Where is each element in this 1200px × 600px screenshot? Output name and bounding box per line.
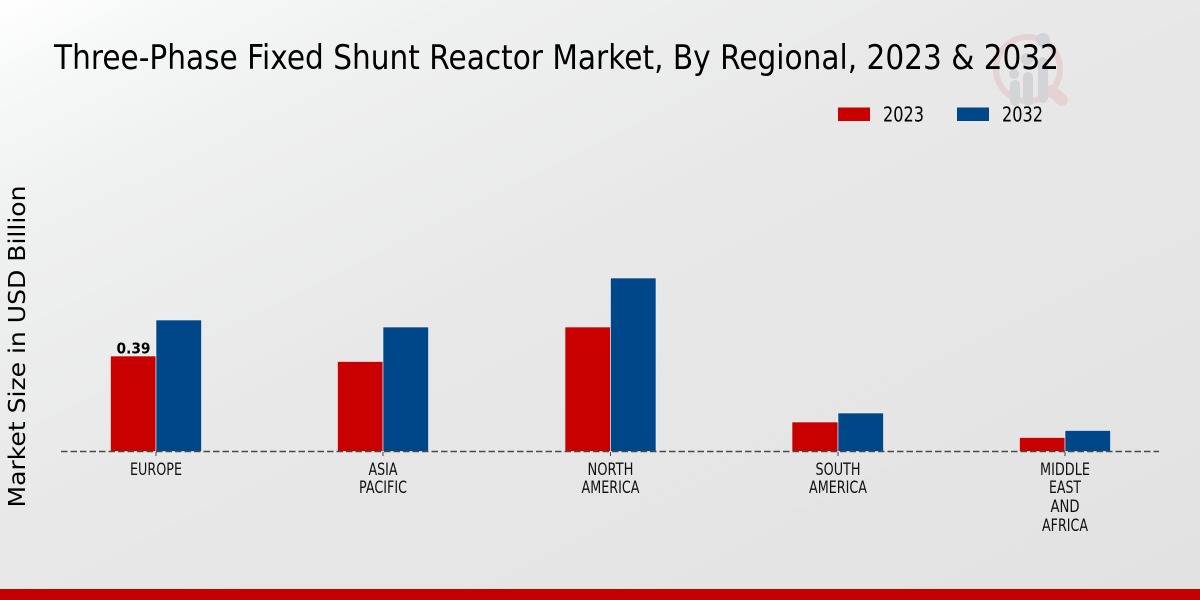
category label: Middle East and Africa <box>1040 460 1090 535</box>
category label: South America <box>809 460 868 497</box>
legend item: 2023: 2023 <box>883 102 924 126</box>
category label: Europe: EUROPE <box>130 460 182 479</box>
data label: Europe 2023: 0.39 <box>116 340 150 358</box>
footer bar <box>0 589 1200 600</box>
bars: Asia Pacific <box>338 327 428 452</box>
legend <box>838 102 1043 126</box>
bars: Middle East and Africa <box>1020 430 1110 452</box>
category label: North America <box>582 460 640 497</box>
category label: North America: NORTH <box>588 460 634 479</box>
legend item: 2032 <box>957 102 1043 126</box>
category label: South America: SOUTH <box>816 460 860 479</box>
category label: Asia Pacific: ASIA <box>368 460 398 479</box>
category label: Middle East and Africa: EAST <box>1049 478 1082 497</box>
category label: North America: AMERICA <box>582 478 640 497</box>
category label: Asia Pacific <box>359 460 407 497</box>
category label: Middle East and Africa: AND <box>1050 497 1080 516</box>
category label: South America: AMERICA <box>809 478 868 497</box>
icon: watermark magnifier logo <box>996 33 1062 101</box>
baseline axis <box>61 450 1159 452</box>
title: Three-Phase Fixed Shunt Reactor Market, By Regional, 2023 & 2032 <box>53 38 1059 78</box>
legend item: 2023 <box>838 102 924 126</box>
bars: North America <box>565 278 656 452</box>
category label: Asia Pacific: PACIFIC <box>359 478 407 497</box>
bar chart <box>61 278 1159 456</box>
y-axis label: Market Size in USD Billion <box>5 186 31 508</box>
category label: Middle East and Africa: AFRICA <box>1042 516 1089 535</box>
bars: South America <box>792 413 884 452</box>
category label: Middle East and Africa: MIDDLE <box>1040 460 1090 479</box>
bars: Europe <box>110 320 202 452</box>
legend item: 2032: 2032 <box>1002 102 1043 126</box>
